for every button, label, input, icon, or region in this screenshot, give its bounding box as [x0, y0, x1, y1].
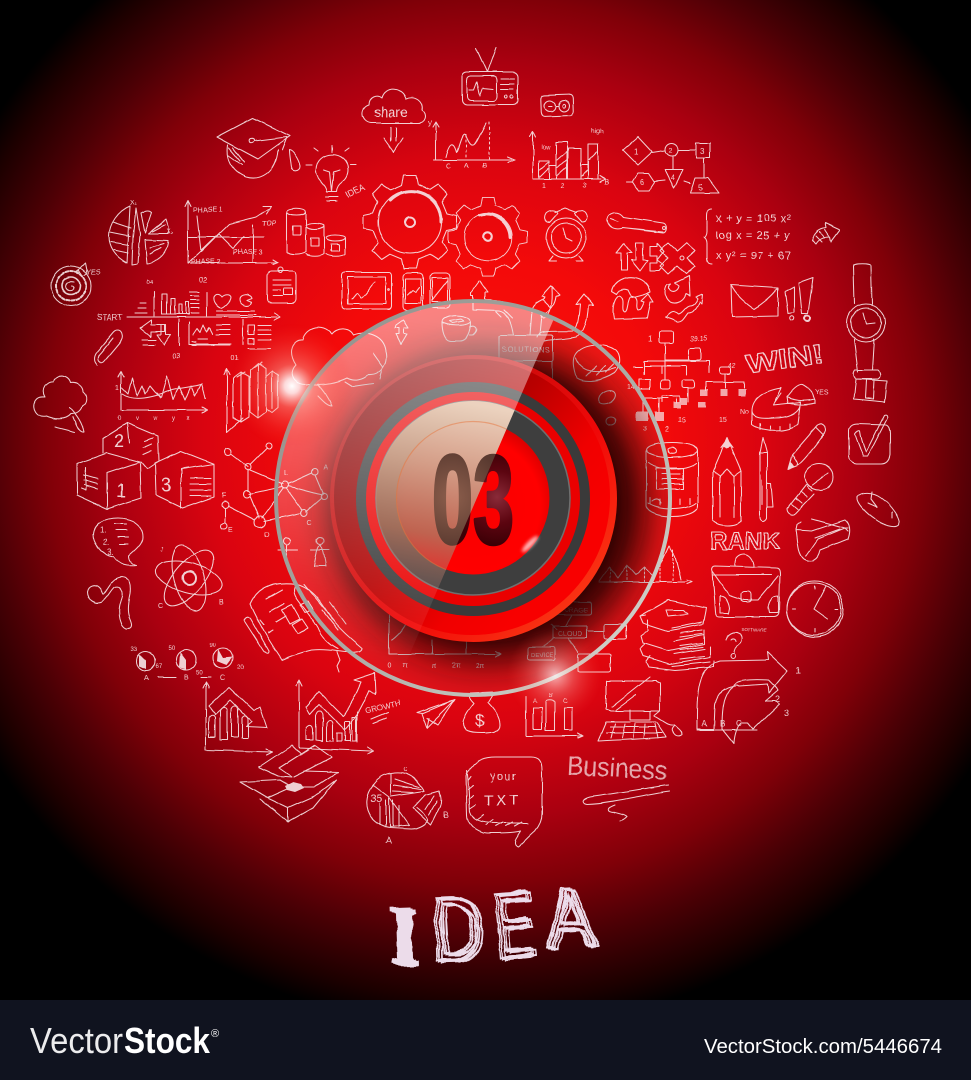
mini pie charts: 50	[168, 646, 175, 652]
icon: atom: B	[219, 599, 224, 606]
icon: branching arrows ABC	[697, 652, 801, 744]
flow diagram: 6	[640, 178, 645, 187]
flow diagram: 2	[669, 148, 673, 155]
icon: book stack	[640, 600, 714, 670]
icon: mouse	[857, 492, 899, 527]
icon: wave chart: 1	[115, 385, 119, 392]
roadmap timeline	[97, 277, 280, 362]
flow diagram: 1	[634, 147, 639, 156]
icon: cloud network: STORAGE	[556, 607, 588, 614]
icon: briefcase	[712, 554, 780, 617]
equations	[704, 209, 792, 264]
icon: envelope	[731, 285, 778, 317]
title: IDEA	[391, 870, 596, 983]
icon: 3D bar chart	[224, 362, 278, 432]
line chart: A	[464, 163, 469, 170]
phase chart: PHASE 3	[233, 249, 263, 256]
icon: hatched cubes: 3	[161, 475, 172, 496]
icon: network graph: A	[323, 465, 328, 472]
icon: open box	[240, 745, 338, 822]
icon: 3D pie chart: YES	[815, 389, 829, 396]
icon: org chart: 2	[665, 426, 669, 433]
bar chart: 1	[542, 183, 546, 190]
flow diagram: 5	[698, 183, 703, 192]
word: RANK: RANK	[710, 528, 781, 555]
mini pie charts: 67	[156, 664, 163, 670]
icon: org chart: 15	[719, 417, 727, 424]
icon: hatched pie chart: X₁	[130, 200, 138, 207]
icon: wave chart: y	[172, 416, 175, 422]
icon: squiggle arrows	[612, 276, 703, 322]
doodles: right column	[463, 331, 899, 847]
icon: curve graph: π	[403, 662, 408, 669]
icon: computer	[598, 677, 682, 741]
icon: branching arrows ABC: 1	[796, 666, 801, 676]
footer logo: Vector	[30, 1020, 123, 1061]
icon: branching arrows ABC: C	[736, 719, 742, 728]
icon: network graph: C	[307, 520, 312, 527]
icon: cloud network: DEVICE	[531, 653, 553, 659]
icon: 3D bars ABC: C	[563, 699, 568, 705]
icon: direction arrows	[616, 243, 695, 274]
icon: hatched cubes: 1	[116, 481, 127, 502]
icon: network graph: F	[222, 493, 226, 500]
glass ring	[276, 301, 670, 695]
word: Business: Business	[566, 750, 668, 786]
doodles: center hidden behind the glass	[221, 281, 692, 672]
icon: org chart: 1	[648, 335, 653, 344]
icon: wall clock	[787, 581, 843, 637]
icon: cylinder	[574, 345, 620, 425]
equations: x y² = 97 + 67	[716, 250, 792, 262]
icon: retro tv	[462, 47, 518, 105]
icon: tin can	[646, 442, 698, 516]
icon: hatched pie chart	[109, 200, 174, 265]
phase chart: PHASE 2	[191, 259, 221, 266]
decline chart	[203, 682, 272, 755]
line chart	[428, 118, 515, 170]
icon: hatched cubes: 2	[114, 431, 124, 451]
icon: pencil slanted	[788, 424, 826, 469]
word: Business	[566, 750, 669, 821]
equations: log x = 25 + y	[716, 230, 790, 242]
icon: solutions box with branching arrows	[471, 281, 593, 381]
icon: pie chart with 35: A	[386, 835, 392, 845]
icon: money bag	[463, 692, 500, 733]
icon: org chart: 3	[643, 426, 647, 433]
icon: money bag: $	[475, 711, 485, 730]
line chart: C	[446, 163, 451, 170]
icon: notepad	[267, 268, 296, 303]
icon: large gear	[364, 176, 456, 268]
icon: tick box	[849, 416, 890, 464]
glass diagonal reflection	[278, 303, 554, 648]
icon: wrist watch	[847, 264, 887, 402]
icon: network graph: D	[264, 532, 269, 539]
icon: speech list bubble	[93, 518, 143, 565]
icon: magnifier	[787, 464, 833, 515]
icon: cloud network	[528, 602, 626, 672]
icon: big cloud	[292, 328, 387, 406]
icon: paperclip	[94, 330, 122, 365]
glass shine overlay	[278, 303, 554, 648]
icon: tablet	[342, 272, 392, 309]
icon: curved arrow	[812, 223, 840, 244]
icon: graduation cap	[217, 118, 300, 178]
icon: branching arrows ABC: B	[720, 719, 725, 728]
icon: curve graph	[387, 610, 501, 670]
icon: wave chart: v	[136, 416, 139, 422]
lens flare bottom	[507, 627, 603, 723]
mini pie charts: C	[220, 675, 225, 682]
roadmap timeline: 02	[199, 277, 207, 284]
icon: atom: J	[160, 547, 163, 553]
icon: speech list bubble: 3.	[107, 547, 114, 556]
icon: paper plane	[417, 700, 455, 728]
doodles: left column	[34, 200, 450, 682]
icon: network graph: E	[228, 527, 233, 534]
inner disc reflection	[376, 401, 514, 588]
bar chart: 3	[583, 183, 587, 190]
glass tint	[276, 301, 670, 695]
doodles: bottom row	[203, 673, 455, 845]
icon: steaming cup	[442, 316, 477, 341]
button drop shadow	[330, 346, 646, 662]
icon: org chart: 15	[678, 417, 686, 424]
roadmap timeline: START	[97, 313, 123, 322]
icon: wave chart	[115, 372, 207, 422]
icon: pawn figures	[278, 538, 329, 566]
icon: curve graph: 0	[387, 663, 391, 670]
icon: hatched pie chart: X₂	[166, 229, 174, 236]
icon: alarm clock	[545, 208, 587, 261]
footer logo	[30, 1020, 219, 1061]
phase chart: PHASE 1	[193, 207, 223, 214]
icon: solutions box with branching arrows: SOLUTIONS	[502, 345, 551, 354]
icon: spiral target: YES	[86, 269, 100, 276]
bar chart	[530, 128, 609, 190]
icon: wave chart: 0	[118, 416, 122, 422]
icon: question with label	[726, 627, 766, 658]
icon: curve graph: 2π	[452, 663, 461, 670]
roadmap timeline: 03	[172, 353, 180, 360]
mini pie charts: 90	[209, 643, 216, 649]
line chart: y	[428, 118, 432, 127]
icon: share cloud	[362, 89, 425, 152]
footer logo: ®	[211, 1028, 219, 1040]
roadmap timeline: 04	[146, 280, 153, 286]
icon: atom	[152, 541, 226, 615]
icon: screw	[395, 320, 408, 344]
icon: speech list bubble: 1.	[100, 526, 107, 535]
mini pie charts: 50	[196, 670, 203, 676]
button outer rim	[330, 355, 617, 642]
numbered button	[330, 355, 617, 642]
icon: hatched cubes	[77, 423, 214, 509]
icon: network graph: L	[284, 470, 288, 477]
growth chart	[296, 673, 402, 754]
outer dark ring	[356, 382, 590, 616]
doodles: top row	[217, 47, 887, 402]
roadmap timeline: 01	[231, 355, 239, 362]
icon: atom: C	[158, 603, 163, 610]
inner red disc	[396, 422, 550, 574]
icon: curve graph: 2π	[476, 663, 485, 670]
icon: 3D pie chart: No	[740, 409, 749, 416]
word: WIN!: WIN!	[744, 339, 826, 379]
icon: curve graph: π	[432, 663, 437, 670]
icon: branching arrows ABC: A	[702, 719, 708, 728]
icon: light bulb: IDEA	[344, 182, 367, 200]
inner disc edge line	[396, 420, 507, 570]
mini pie charts: 20	[237, 665, 244, 671]
icon: 3D bars ABC: A	[533, 699, 537, 705]
icon: 3D pie chart	[740, 385, 829, 431]
footer bar	[0, 1000, 971, 1080]
glass lens	[276, 301, 670, 695]
title: IDEA: I	[391, 890, 418, 983]
icon: speech list bubble: 2.	[103, 538, 110, 547]
title: IDEA: D	[431, 879, 485, 981]
bar chart: high	[591, 128, 604, 135]
icon: question mark	[87, 577, 132, 629]
icon: org chart: 42	[728, 363, 736, 370]
icon: big pencil	[713, 438, 741, 526]
icon: pie chart with 35: B	[443, 811, 448, 820]
phase chart	[185, 200, 278, 266]
number 03: 03	[432, 431, 514, 570]
icon: exclamation marks	[785, 278, 813, 321]
lens flare left	[230, 324, 354, 448]
mini pie charts: A	[144, 675, 149, 682]
icon: question with label: SOFTWARE	[741, 627, 766, 632]
disc highlight	[520, 534, 540, 554]
bar chart: low	[541, 145, 551, 151]
flow diagram: 3	[700, 147, 705, 156]
flow diagram	[623, 137, 719, 193]
icon: network graph	[221, 443, 328, 539]
bar chart: B	[604, 179, 609, 186]
icon: branching arrows ABC: 3	[784, 708, 789, 718]
title: IDEA: E	[491, 874, 537, 978]
phase chart: TOP	[262, 221, 277, 228]
mini pie charts: B	[184, 675, 189, 682]
footer logo: Stock	[124, 1020, 211, 1061]
icon: sunglasses	[796, 519, 850, 561]
icon: pen	[760, 438, 773, 521]
icon: go badge	[541, 94, 573, 117]
speech bubble: your TXT	[466, 757, 542, 847]
mini pie charts	[131, 643, 244, 682]
icon: org chart	[627, 331, 746, 433]
bar chart: 2	[561, 183, 565, 190]
icon: wave chart: x	[187, 416, 190, 422]
growth chart: GROWTH	[364, 698, 402, 716]
flow diagram: 4	[671, 175, 675, 182]
icon: wave chart: w	[152, 416, 158, 422]
icon: org chart: 39.15	[690, 336, 708, 343]
icon: light bulb	[306, 146, 367, 201]
icon: branching arrows ABC: 2	[775, 694, 780, 704]
equations: x + y = 105 x²	[716, 213, 791, 225]
speech bubble: your TXT: TXT	[484, 792, 521, 809]
icon: 3D bars ABC: B	[549, 693, 553, 699]
icon: thought cloud	[34, 376, 86, 432]
icon: pie chart with 35: C	[403, 767, 408, 773]
icon: org chart: 14	[627, 384, 635, 391]
icon: mountain line chart	[599, 546, 692, 584]
icon: wrench	[607, 213, 666, 233]
icon: 3D bars ABC	[526, 693, 583, 738]
mini pie charts: 33	[131, 647, 138, 653]
speech bubble: your TXT: your	[490, 771, 517, 783]
icon: open book	[244, 583, 362, 672]
icon: spiral target	[51, 263, 100, 306]
red band	[366, 392, 580, 606]
icon: pie chart with 35	[366, 767, 448, 845]
icon: cloud network: CLOUD	[558, 631, 583, 638]
inner dark ring	[376, 401, 570, 595]
icon: smartphones	[403, 273, 450, 310]
icon: share cloud: share	[374, 105, 408, 120]
footer image id: VectorStock.com/5446674	[704, 1036, 942, 1058]
icon: pie chart with 35: 35	[370, 793, 382, 805]
line chart: B	[482, 163, 487, 170]
title: IDEA: A	[544, 870, 596, 966]
icon: labelled cans	[287, 208, 345, 256]
icon: small gear	[448, 197, 528, 277]
button face	[334, 359, 610, 635]
